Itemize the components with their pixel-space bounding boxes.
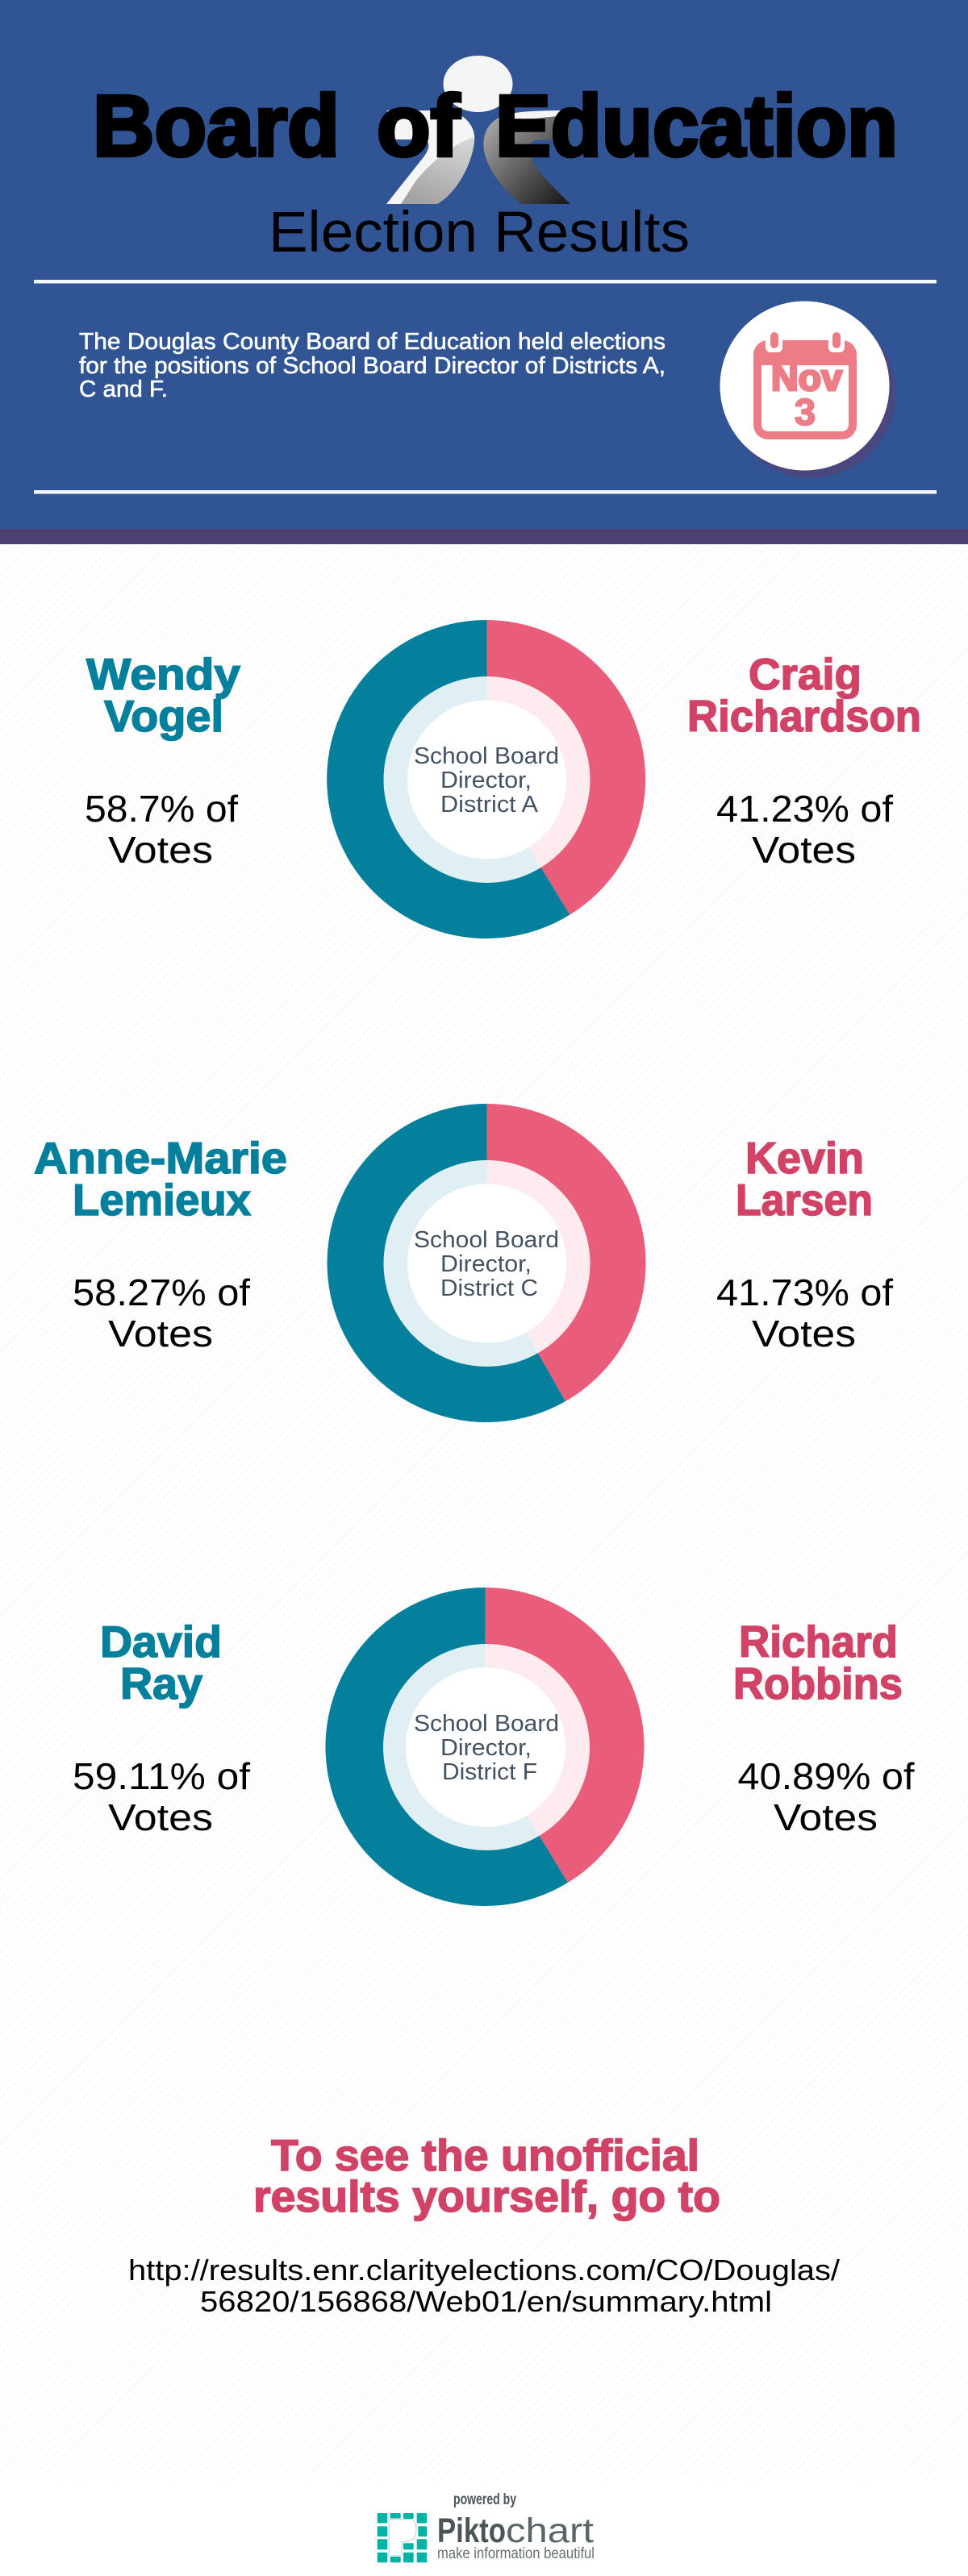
title: Board [93,77,340,174]
candidate name: Richard Robbins: Robbins [733,1658,903,1708]
bottom divider [34,490,937,493]
donut chart: District C: School Board [414,1227,559,1253]
donut chart: District A: District A [440,792,539,818]
results URL: 56820/156868/Web01/en/summary.html [200,2285,772,2318]
header bottom band [0,529,968,544]
icon: Piktochart logo [378,2513,427,2562]
candidate name: Anne-Marie Lemieux: Lemieux [73,1175,251,1225]
candidate name: David Ray [100,1617,222,1708]
candidate name: David Ray: David [100,1617,222,1667]
title [93,77,898,174]
vote share: David Ray [73,1755,250,1838]
donut chart: District F [325,1588,644,1906]
candidate name: Kevin Larsen: Larsen [736,1175,873,1225]
candidate name: Wendy Vogel: Vogel [104,691,223,741]
Piktochart wordmark: chart [506,2511,594,2550]
panel: footer branding [0,2479,968,2576]
panel: call to action [128,2130,840,2318]
vote share: Kevin Larsen: 41.73% of [716,1271,893,1313]
candidate name: Kevin Larsen: Kevin [745,1133,864,1183]
call to action heading: To see the unofficial [271,2130,699,2180]
panel: District F results [73,1588,915,1906]
donut chart: District F: Director, [440,1735,532,1761]
icon: calendar badge, Nov 3 [720,302,895,477]
candidate name: Craig Richardson: Craig [749,649,862,699]
vote share: Wendy Vogel: 58.7% of [85,788,238,830]
vote share: Anne-Marie Lemieux [73,1271,250,1355]
intro text [79,329,666,402]
intro text: The Douglas County Board of Education held elections [79,329,666,355]
Piktochart wordmark: Pikto [437,2511,506,2550]
donut chart: District A: School Board [414,743,559,769]
vote share: Craig Richardson: 41.23% of [716,788,893,830]
panel: District A results [85,620,921,938]
page background [0,544,968,2479]
intro text: C and F. [79,377,168,402]
vote share: David Ray: Votes [108,1796,213,1838]
header background [0,0,968,529]
footer background [0,2479,968,2576]
donut chart: District F: School Board [414,1711,559,1737]
results URL: http://results.enr.clarityelections.com/CO/Douglas/ [128,2253,840,2287]
candidate name: Anne-Marie Lemieux [34,1133,287,1225]
intro text: for the positions of School Board Director of Districts A, [79,353,666,379]
vote share: Richard Robbins: Votes [774,1796,878,1838]
icon: calendar badge, Nov 3: Nov [771,357,842,398]
call to action heading [253,2130,720,2221]
vote share: Anne-Marie Lemieux: Votes [108,1313,213,1355]
candidate name: Anne-Marie Lemieux: Anne-Marie [34,1133,287,1183]
candidate name: Kevin Larsen [736,1133,873,1225]
results URL [128,2253,840,2318]
vote share: Wendy Vogel [85,788,238,871]
vote share: Richard Robbins: 40.89% of [737,1755,915,1797]
panel: District C results [34,1104,893,1422]
donut chart: District C: Director, [440,1251,532,1277]
vote share: Wendy Vogel: Votes [108,829,213,871]
candidate name: Wendy Vogel [86,649,240,741]
donut chart: District A: Director, [440,768,532,793]
donut chart: District A [327,620,645,938]
donut chart: District C: District C [440,1276,538,1301]
candidate name: Wendy Vogel: Wendy [86,649,240,699]
vote share: Anne-Marie Lemieux: 58.27% of [73,1271,250,1313]
icon: school district figure logo [386,56,570,204]
title: of [377,77,461,174]
Piktochart tagline: make information beautiful [437,2545,595,2562]
candidate name: Richard Robbins: Richard [739,1617,898,1667]
candidate name: Richard Robbins [733,1617,903,1708]
vote share: Richard Robbins [737,1755,915,1838]
donut chart: District F: District F [442,1759,537,1785]
candidate name: Craig Richardson: Richardson [687,691,921,741]
powered by label: powered by [453,2491,516,2508]
vote share: Kevin Larsen [716,1271,893,1355]
candidate name: Craig Richardson [687,649,921,741]
vote share: David Ray: 59.11% of [73,1755,250,1797]
donut chart: District C [328,1104,646,1422]
title: Education [495,77,898,174]
vote share: Kevin Larsen: Votes [752,1313,856,1355]
vote share: Craig Richardson [716,788,893,871]
top divider [34,280,937,284]
call to action heading: results yourself, go to [253,2171,720,2221]
Piktochart wordmark [437,2511,594,2550]
vote share: Craig Richardson: Votes [752,829,856,871]
candidate name: David Ray: Ray [120,1658,202,1708]
subtitle: Election Results [269,201,690,264]
icon: calendar badge, Nov 3: 3 [795,391,816,433]
panel: header [0,0,968,544]
